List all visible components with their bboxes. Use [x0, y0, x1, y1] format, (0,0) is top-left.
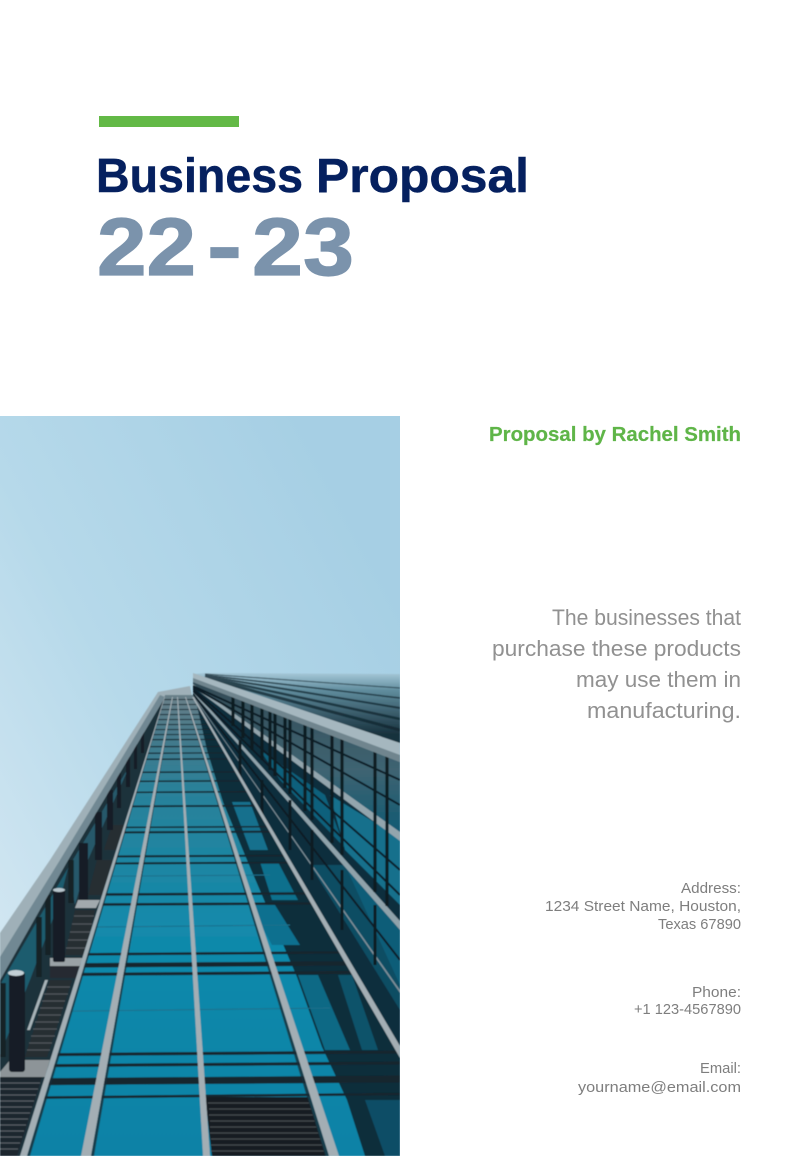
- description: The businesses that: [552, 605, 741, 630]
- year range: 22: [97, 202, 196, 293]
- year range: 23: [252, 202, 354, 293]
- email: yourname@email.com: [578, 1079, 741, 1096]
- address: Address:: [681, 880, 741, 897]
- photo: glass skyscraper seen from below: [0, 416, 400, 1156]
- main glass facade: [0, 695, 400, 1156]
- dark posts: [3, 860, 71, 1057]
- description: may use them in: [576, 667, 741, 692]
- title: Proposal: [316, 150, 529, 203]
- cornice of right wall: [193, 673, 400, 762]
- mullions of facade: [17, 697, 339, 1156]
- teal reflections: [250, 905, 300, 945]
- walkway grate: [25, 980, 72, 1057]
- proposal author: Proposal by Rachel Smith: [489, 424, 741, 446]
- shaded part of facade: [195, 697, 400, 1156]
- right wall of building: [193, 680, 400, 1056]
- left cornice: [0, 686, 192, 980]
- phone: +1 123-4567890: [634, 1001, 741, 1018]
- cylinders: [8, 731, 144, 1072]
- left side of building: [0, 697, 165, 1156]
- address: [545, 880, 741, 933]
- year range: -: [207, 201, 242, 292]
- address: 1234 Street Name, Houston,: [545, 898, 741, 915]
- email: [578, 1060, 741, 1096]
- description: [492, 605, 741, 723]
- pale ledges: [0, 1060, 50, 1077]
- description: purchase these products: [492, 636, 741, 661]
- accent bar: [99, 116, 239, 127]
- email: Email:: [700, 1060, 741, 1077]
- phone: Phone:: [692, 984, 741, 1001]
- address: Texas 67890: [658, 916, 741, 933]
- title: [96, 150, 529, 203]
- bottom grate: [0, 1077, 42, 1156]
- thin pane splits: [72, 874, 330, 1012]
- wall ledges: [193, 684, 400, 841]
- wall diagonals: [193, 686, 400, 960]
- title: Business: [96, 150, 303, 203]
- wall columns: [233, 690, 387, 906]
- year range: [97, 201, 354, 293]
- phone: [634, 984, 741, 1018]
- horizontal dark bands: [44, 698, 400, 1100]
- glass wall: [0, 868, 68, 1055]
- rooftop: [193, 673, 400, 745]
- ledge: [27, 980, 48, 1030]
- facade edge mullion: [192, 697, 400, 1058]
- description: manufacturing.: [587, 698, 741, 723]
- vent: [205, 1097, 326, 1156]
